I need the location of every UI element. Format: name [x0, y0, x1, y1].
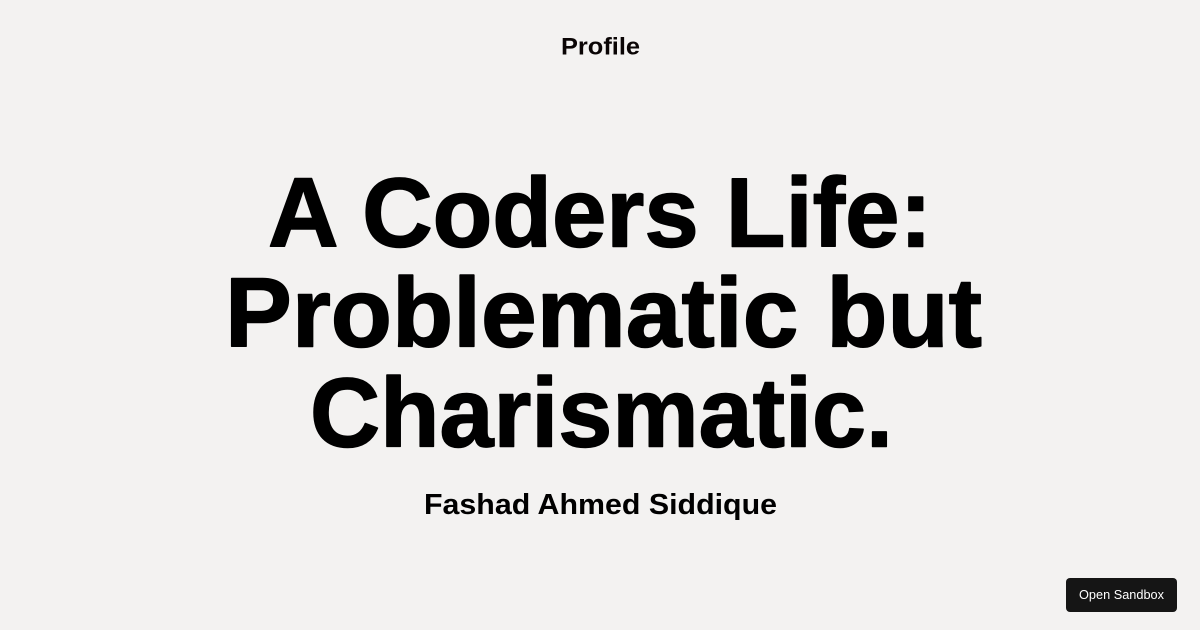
title: A Coders Life: [268, 158, 932, 268]
title: Problematic but [225, 258, 982, 368]
title: Charismatic. [310, 358, 893, 468]
title [225, 158, 982, 468]
author name: Fashad Ahmed Siddique [424, 489, 777, 521]
button: Open Sandbox: Open Sandbox [1079, 587, 1164, 602]
button: Open Sandbox [1066, 578, 1177, 612]
top label: Profile: Profile [561, 34, 640, 60]
